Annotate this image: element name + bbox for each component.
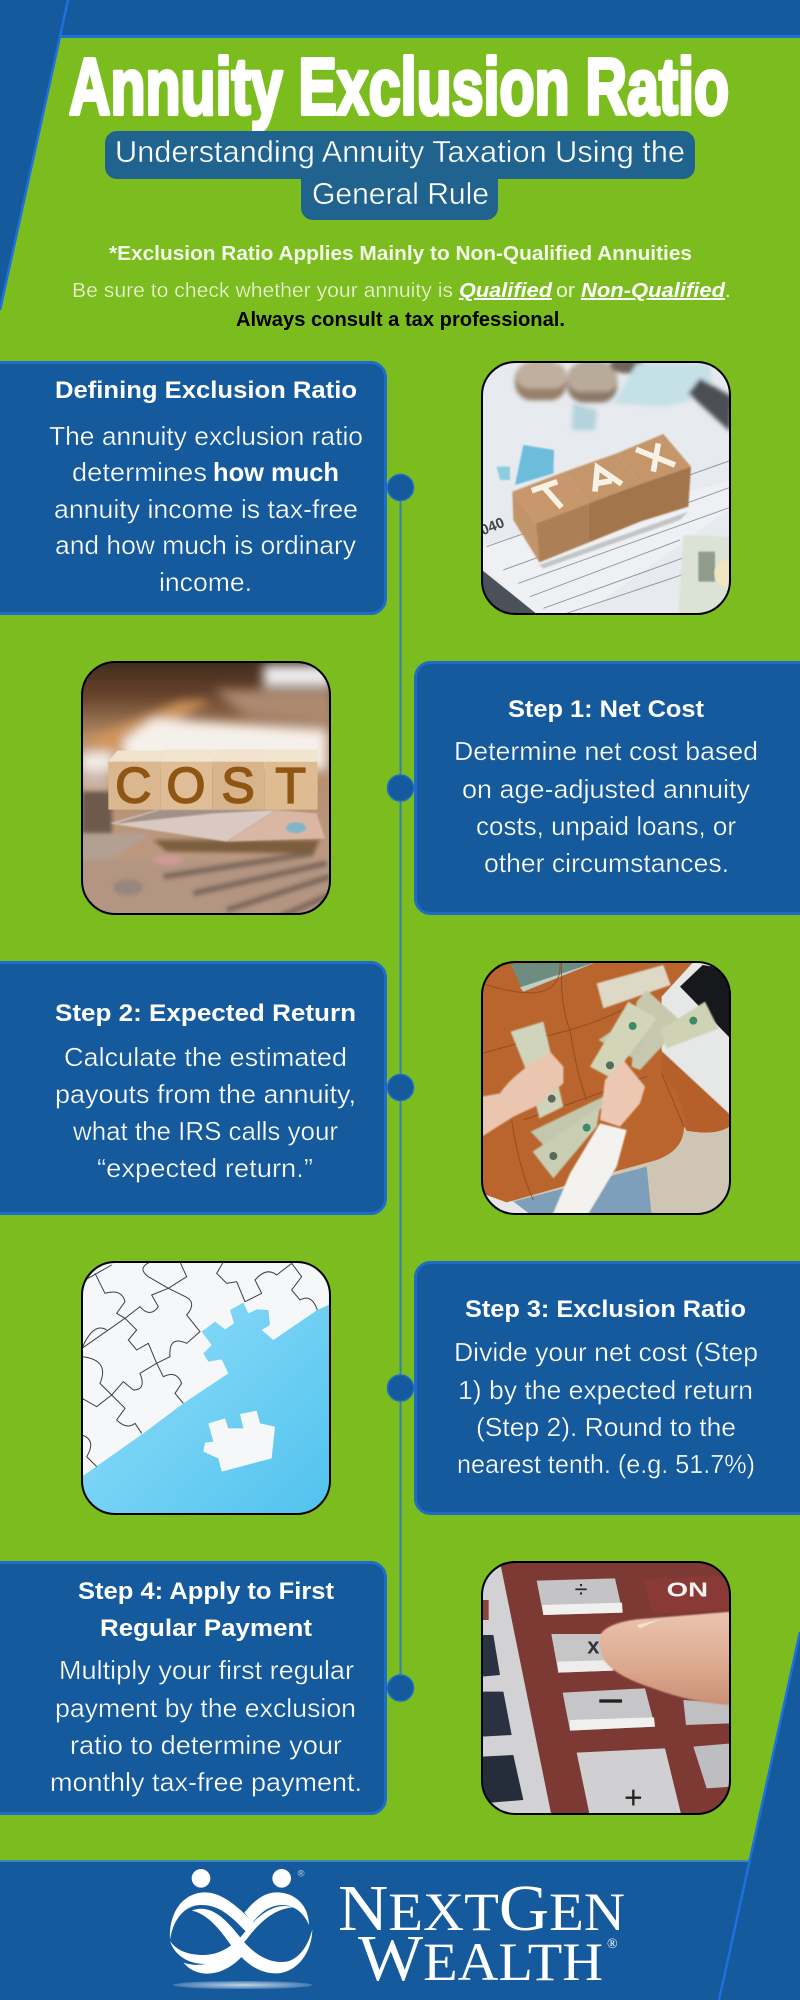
photo: cost blocks: T bbox=[275, 758, 306, 814]
note: check qualified or non-qualified: Qualified bbox=[459, 280, 553, 302]
panel: step 1 net cost: costs, unpaid loans, or bbox=[476, 811, 736, 841]
panel: defining exclusion ratio: determines bbox=[72, 457, 207, 487]
panel: step 4 apply to first regular payment: Multiply your first regular bbox=[59, 1655, 354, 1685]
note: non-qualified annuities: *Exclusion Ratio Applies Mainly to Non-Qualified Annuities bbox=[109, 243, 692, 265]
timeline line bbox=[400, 487, 402, 1688]
photo: tax blocks: 040 bbox=[478, 515, 507, 539]
photo: calculator bbox=[480, 1560, 732, 1817]
panel: step 4 apply to first regular payment: Regular Payment bbox=[100, 1615, 312, 1642]
wordmark: ® bbox=[607, 1937, 618, 1952]
subtitle: General Rule bbox=[312, 176, 489, 211]
panel: step 3 exclusion ratio: nearest tenth. (e.g. 51.7%) bbox=[457, 1449, 755, 1479]
photo: cost blocks: C bbox=[115, 758, 151, 814]
note: check qualified or non-qualified: Non-Qualified bbox=[581, 280, 726, 302]
logo: nextgen wealth bbox=[170, 1869, 625, 1995]
panel: step 2 expected return bbox=[0, 962, 386, 1214]
panel: step 4 apply to first regular payment: Step 4: Apply to First bbox=[78, 1578, 334, 1605]
panel: step 1 net cost: on age-adjusted annuity bbox=[462, 774, 750, 804]
panel: step 4 apply to first regular payment: monthly tax-free payment. bbox=[50, 1767, 362, 1797]
wordmark bbox=[338, 1872, 625, 1995]
subtitle: Understanding Annuity Taxation Using the bbox=[115, 134, 685, 169]
panel: defining exclusion ratio: Defining Exclusion Ratio bbox=[55, 377, 357, 404]
wordmark: WEALTH bbox=[358, 1922, 603, 1995]
panel: step 3 exclusion ratio bbox=[416, 1262, 800, 1514]
photo: hands counting money bbox=[480, 960, 733, 1217]
panel: defining exclusion ratio bbox=[0, 362, 386, 614]
photo: tax blocks bbox=[478, 357, 742, 617]
icon: two figures infinity mark bbox=[170, 1869, 313, 1989]
panel: step 2 expected return: Step 2: Expected Return bbox=[55, 1000, 356, 1027]
panel: step 1 net cost: Step 1: Net Cost bbox=[508, 696, 704, 723]
top band bbox=[0, 0, 800, 310]
photo: cost blocks bbox=[80, 660, 333, 917]
icon: two figures infinity mark: ® bbox=[298, 1869, 305, 1879]
panel: step 2 expected return: Calculate the estimated bbox=[64, 1042, 347, 1072]
panel: defining exclusion ratio: The annuity exclusion ratio bbox=[49, 421, 363, 451]
photo: calculator: + bbox=[624, 1779, 643, 1815]
panel: step 3 exclusion ratio: Divide your net cost (Step bbox=[454, 1337, 758, 1367]
subtitle bbox=[105, 131, 695, 220]
photo: cost blocks: S bbox=[221, 758, 255, 814]
panel: defining exclusion ratio: and how much is ordinary bbox=[55, 530, 356, 560]
panel: defining exclusion ratio: income. bbox=[159, 567, 252, 597]
photo: cost blocks: O bbox=[167, 758, 205, 814]
panel: step 2 expected return: what the IRS calls your bbox=[72, 1116, 338, 1146]
note: consult a professional: Always consult a tax professional. bbox=[236, 309, 565, 331]
panel: step 2 expected return: payouts from the annuity, bbox=[55, 1079, 356, 1109]
photo: calculator: ON bbox=[667, 1579, 708, 1602]
photo: puzzle bbox=[80, 1260, 332, 1516]
panel: step 4 apply to first regular payment: ratio to determine your bbox=[70, 1730, 342, 1760]
wordmark: NEXTGEN bbox=[338, 1872, 625, 1945]
panel: defining exclusion ratio: how much bbox=[213, 457, 339, 487]
panel: step 4 apply to first regular payment bbox=[0, 1562, 386, 1814]
note: check qualified or non-qualified: or bbox=[556, 280, 575, 302]
panel: step 3 exclusion ratio: 1) by the expected return bbox=[458, 1375, 753, 1405]
note: check qualified or non-qualified: Be sure to check whether your annuity is bbox=[72, 280, 453, 302]
timeline dots bbox=[388, 474, 414, 1701]
panel: step 2 expected return: “expected return.” bbox=[97, 1153, 313, 1183]
photo: calculator: ÷ bbox=[575, 1576, 588, 1602]
panel: step 1 net cost bbox=[416, 662, 800, 914]
panel: defining exclusion ratio: annuity income is tax-free bbox=[54, 494, 358, 524]
panel: step 3 exclusion ratio: (Step 2). Round to the bbox=[476, 1412, 736, 1442]
panel: step 1 net cost: other circumstances. bbox=[484, 848, 729, 878]
note: check qualified or non-qualified bbox=[72, 280, 731, 302]
panel: step 1 net cost: Determine net cost based bbox=[454, 736, 758, 766]
note: check qualified or non-qualified: . bbox=[725, 280, 731, 302]
panel: step 3 exclusion ratio: Step 3: Exclusion Ratio bbox=[465, 1296, 746, 1323]
panel: step 4 apply to first regular payment: payment by the exclusion bbox=[55, 1693, 356, 1723]
bottom band bbox=[0, 1632, 800, 2000]
photo: calculator: x bbox=[587, 1633, 600, 1658]
